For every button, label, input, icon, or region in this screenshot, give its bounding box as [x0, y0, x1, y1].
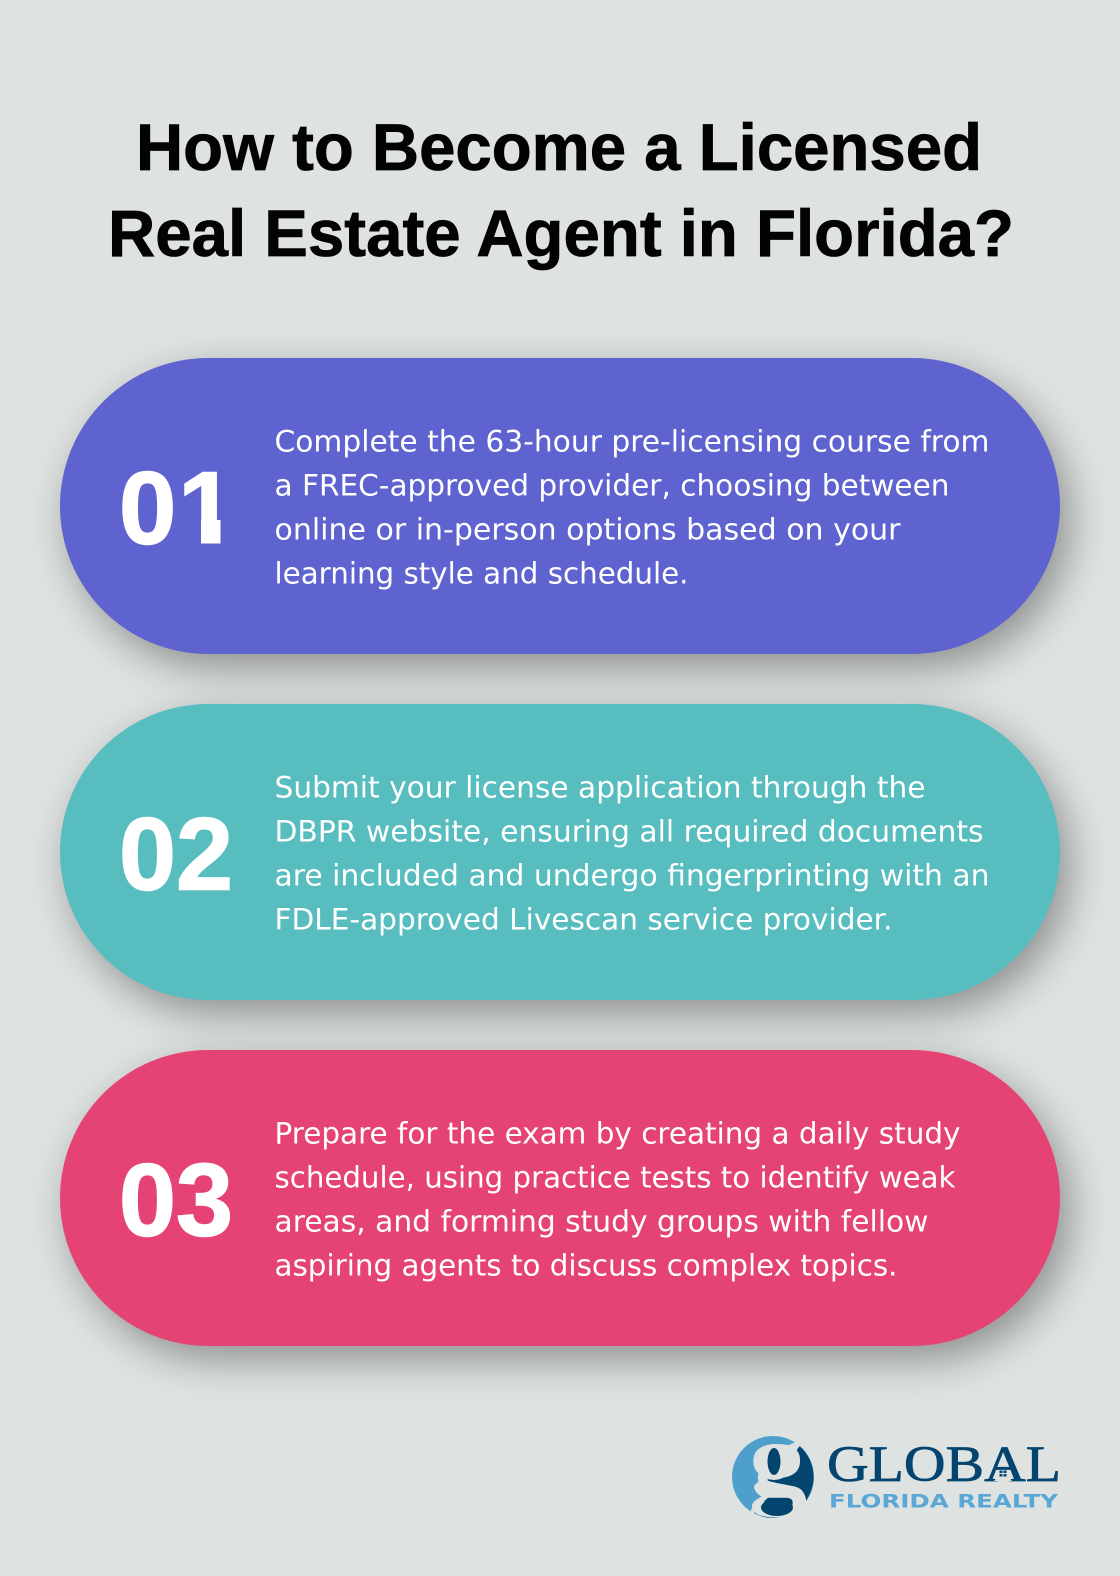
title — [108, 110, 1014, 270]
icon: house window in the A — [994, 1470, 1012, 1481]
wordmark: GLOBAL: GLOBAL — [827, 1437, 1061, 1493]
step 03 description — [274, 1117, 960, 1282]
step 03 description: areas, and forming study groups with fellow — [274, 1205, 928, 1239]
panel: step 02 — [60, 704, 1060, 1000]
step 03 description: aspiring agents to discuss complex topics. — [274, 1248, 898, 1282]
step 03 description: schedule, using practice tests to identify weak — [274, 1161, 956, 1195]
icon: g monogram — [732, 1400, 814, 1518]
step 01 description: learning style and schedule. — [274, 556, 688, 590]
step number 01 — [119, 450, 240, 566]
step 01 description: online or in-person options based on your — [274, 513, 901, 547]
logo: Global Florida Realty — [732, 1430, 1061, 1518]
step 02 description — [274, 771, 990, 936]
step number 01: 1 — [178, 450, 235, 566]
step 03 description: Prepare for the exam by creating a daily study — [274, 1117, 960, 1151]
title: Real Estate Agent in Florida? — [108, 196, 1014, 270]
step number 02: 02 — [119, 796, 233, 912]
step number 03: 03 — [119, 1142, 233, 1258]
step 01 description — [274, 425, 990, 590]
step 02 description: Submit your license application through the — [274, 771, 926, 805]
panel: step 03 — [60, 1050, 1060, 1346]
title: How to Become a Licensed — [136, 110, 982, 184]
step number 01: 0 — [119, 450, 176, 566]
step 01 description: a FREC-approved provider, choosing between — [274, 469, 950, 503]
wordmark: FLORIDA REALTY: FLORIDA REALTY — [829, 1492, 1059, 1512]
step 02 description: FDLE-approved Livescan service provider. — [274, 902, 893, 936]
panel: step 01 — [60, 358, 1060, 654]
step 02 description: are included and undergo fingerprinting with an — [274, 859, 990, 893]
step 02 description: DBPR website, ensuring all required documents — [274, 815, 984, 849]
step 01 description: Complete the 63-hour pre-licensing course from — [274, 425, 990, 459]
